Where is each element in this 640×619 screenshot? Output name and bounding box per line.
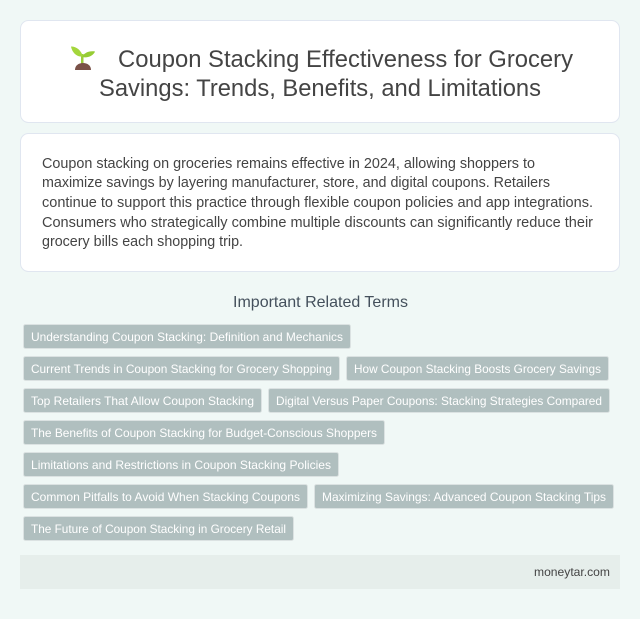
- heading: related terms: Important Related Terms: [233, 294, 408, 311]
- tag list: [24, 324, 614, 540]
- panel: title: [20, 20, 620, 122]
- summary text: maximize savings by layering manufacturer, store, and digital coupons. Retailers: [42, 175, 550, 191]
- tag: The Future of Coupon Stacking in Grocery Retail: [31, 522, 286, 536]
- summary text: continue to support this practice through flexible coupon policies and app integrations.: [42, 195, 593, 211]
- title text: [99, 46, 573, 102]
- tag: Common Pitfalls to Avoid When Stacking Coupons: [31, 490, 300, 504]
- tag: [346, 356, 608, 380]
- tag: [24, 452, 338, 476]
- tag: Limitations and Restrictions in Coupon Stacking Policies: [31, 458, 331, 472]
- tag: [314, 484, 614, 508]
- tag: How Coupon Stacking Boosts Grocery Savings: [354, 362, 601, 376]
- panel: summary: [20, 134, 620, 272]
- tag: [24, 356, 340, 380]
- tag: Digital Versus Paper Coupons: Stacking Strategies Compared: [276, 394, 602, 408]
- tag: [24, 484, 308, 508]
- title text: Savings: Trends, Benefits, and Limitations: [99, 75, 541, 102]
- title text: Coupon Stacking Effectiveness for Grocery: [118, 46, 573, 73]
- tag: Understanding Coupon Stacking: Definition and Mechanics: [31, 330, 343, 344]
- footer: moneytar.com: [534, 565, 610, 579]
- tag: Top Retailers That Allow Coupon Stacking: [31, 394, 254, 408]
- footer: [20, 555, 620, 589]
- tag: The Benefits of Coupon Stacking for Budget-Conscious Shoppers: [31, 426, 377, 440]
- tag: [24, 324, 350, 348]
- tag: Current Trends in Coupon Stacking for Grocery Shopping: [31, 362, 332, 376]
- summary text: grocery bills each shopping trip.: [42, 234, 243, 250]
- tag: [24, 420, 384, 444]
- tag: [24, 516, 294, 540]
- summary text: Coupon stacking on groceries remains effective in 2024, allowing shoppers to: [42, 156, 535, 172]
- tag: [268, 388, 610, 412]
- summary text: Consumers who strategically combine multiple discounts can significantly reduce their: [42, 215, 593, 231]
- tag: [24, 388, 262, 412]
- icon: seedling: [71, 46, 95, 70]
- tag: Maximizing Savings: Advanced Coupon Stacking Tips: [322, 490, 606, 504]
- summary text: [42, 156, 593, 250]
